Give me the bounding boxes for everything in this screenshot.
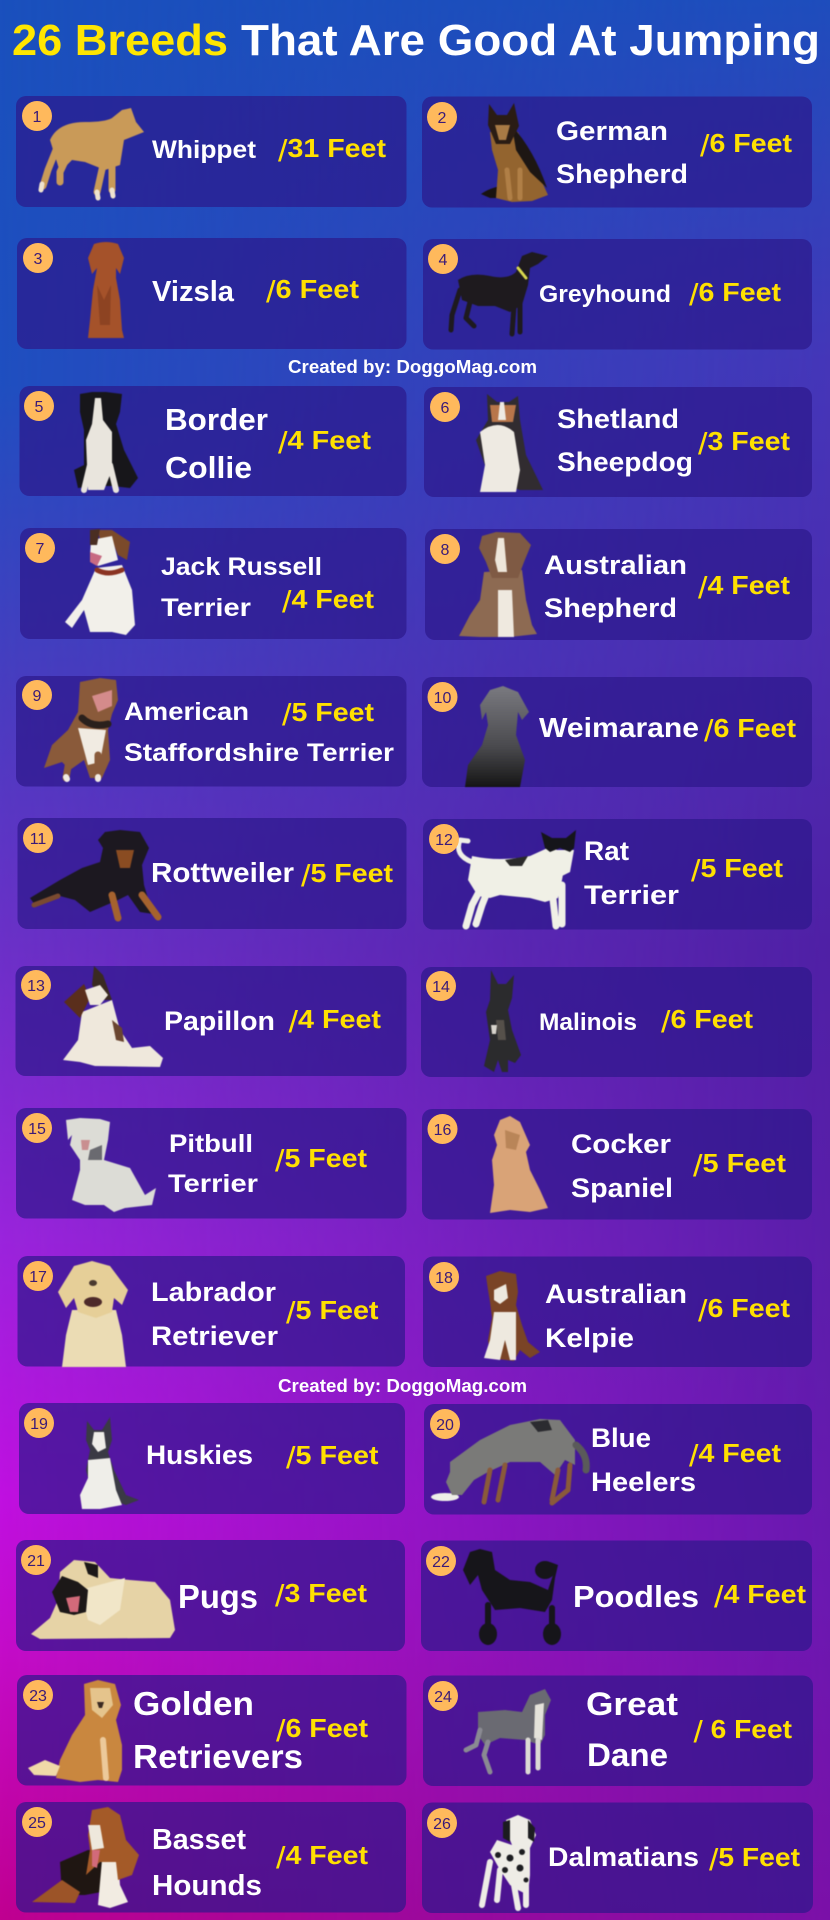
number badge 14 [426, 971, 456, 1001]
jump height: 4 Feet [723, 1579, 806, 1609]
breed name: Border [165, 402, 268, 437]
breed name: Terrier [161, 594, 251, 622]
panel: card 26 Dalmatians [422, 1802, 813, 1913]
jump height: / [275, 1578, 285, 1613]
breed name [545, 1279, 687, 1353]
panel: card 5 Border Collie [20, 386, 406, 496]
icon: pug [31, 1560, 175, 1639]
breed name: Sheepdog [557, 447, 693, 477]
breed name [591, 1423, 696, 1497]
panel: card 6 Shetland Sheepdog [424, 387, 812, 497]
breed name: Great [586, 1686, 678, 1722]
title [12, 16, 820, 65]
number badge 8 [430, 534, 460, 564]
number badge 10: 10 [434, 690, 452, 707]
jump height: 5 Feet [284, 1143, 367, 1173]
panel: card 9 American Staffordshire Terrier [16, 676, 406, 786]
icon: australian shepherd [459, 532, 537, 637]
jump height: 5 Feet [296, 1295, 379, 1325]
number badge 9: 9 [33, 688, 42, 705]
number badge 6: 6 [441, 400, 450, 417]
breed name [161, 553, 322, 622]
breed name: Terrier [584, 880, 680, 910]
panel: card 10 Weimaraner [422, 677, 812, 787]
panel: card 15 Pitbull Terrier [16, 1108, 406, 1218]
breed name: Shetland [557, 404, 679, 434]
breed name [165, 402, 268, 485]
jump height: / [689, 1438, 699, 1473]
breed name [557, 404, 693, 477]
number badge 25: 25 [28, 1815, 46, 1832]
jump height: / [698, 426, 708, 461]
breed name [133, 1685, 303, 1775]
number badge 22: 22 [432, 1554, 450, 1571]
number badge 18: 18 [435, 1270, 453, 1287]
jump height: / [698, 1293, 708, 1328]
number badge 11: 11 [30, 831, 46, 848]
jump height: 4 Feet [707, 570, 790, 600]
number badge 1: 1 [33, 109, 42, 126]
breed name: Pugs [178, 1578, 258, 1615]
number badge 9 [22, 680, 52, 710]
icon: shetland sheepdog [476, 394, 543, 492]
jump height: / [266, 274, 276, 309]
jump height: / [714, 1579, 724, 1614]
breed name [586, 1686, 678, 1773]
number badge 2 [427, 102, 457, 132]
icon: husky [80, 1417, 139, 1509]
panel: card 1 Whippet [16, 96, 406, 207]
number badge 25 [22, 1807, 52, 1837]
icon: border collie [74, 392, 138, 490]
breed name: Retriever [151, 1321, 279, 1351]
panel: card 2 German Shepherd [422, 96, 812, 208]
number badge 7: 7 [36, 541, 45, 558]
jump height: 5 Feet [718, 1842, 800, 1872]
jump height: 4 Feet [298, 1004, 381, 1034]
number badge 10 [428, 682, 458, 712]
panel: card 24 Great Dane [423, 1676, 813, 1786]
icon: american staffordshire terrier [44, 678, 118, 779]
icon: pitbull terrier [66, 1118, 156, 1212]
jump height: / [275, 1143, 285, 1178]
jump height: 31 Feet [287, 133, 386, 163]
jump height: / [694, 1714, 703, 1749]
breed name: Labrador [151, 1277, 277, 1307]
jump height: 6 Feet [698, 277, 781, 307]
panel: card 20 Blue Heelers [424, 1404, 812, 1514]
breed name: Cocker [571, 1129, 672, 1159]
title: That Are Good At Jumping [241, 16, 820, 65]
number badge 12: 12 [435, 832, 453, 849]
breed name: Spaniel [571, 1173, 673, 1203]
number badge 23: 23 [29, 1688, 47, 1705]
breed name: Australian [545, 1279, 687, 1309]
panel: card 14 Malinois [421, 967, 812, 1077]
icon: rottweiler [30, 830, 160, 918]
icon: papillon [63, 966, 163, 1067]
number badge 16: 16 [434, 1122, 452, 1139]
credit line: Created by: DoggoMag.com [278, 1376, 527, 1396]
jump height: 5 Feet [703, 1148, 786, 1178]
breed name [544, 550, 687, 623]
panel: card 17 Labrador Retriever [18, 1256, 405, 1367]
icon: rat terrier [458, 830, 576, 926]
jump height: / [691, 853, 701, 888]
jump height: / [278, 133, 288, 168]
jump height: 5 Feet [296, 1440, 379, 1470]
number badge 26: 26 [433, 1816, 451, 1833]
breed name: Vizsla [152, 276, 235, 308]
breed name: Pitbull [169, 1130, 253, 1158]
breed name: German [556, 116, 668, 146]
breed name [556, 116, 688, 189]
number badge 15 [22, 1113, 52, 1143]
number badge 21: 21 [27, 1553, 45, 1570]
number badge 22 [426, 1546, 456, 1576]
breed name: Terrier [168, 1170, 258, 1198]
icon: basset hound [32, 1807, 139, 1908]
panel: card 8 Australian Shepherd [425, 529, 812, 640]
panel: card 21 Pugs [16, 1540, 405, 1651]
breed name: Huskies [146, 1440, 253, 1470]
breed name: Staffordshire Terrier [124, 739, 394, 767]
panel: card 3 Vizsla [17, 238, 406, 349]
jump height: 5 Feet [310, 858, 393, 888]
icon: poodle [463, 1549, 561, 1645]
breed name [151, 1277, 279, 1351]
breed name: Heelers [591, 1467, 696, 1497]
icon: cocker spaniel [490, 1116, 548, 1213]
breed name [124, 698, 394, 767]
breed name: Golden [133, 1685, 254, 1722]
jump height: / [700, 128, 710, 163]
number badge 16 [428, 1114, 458, 1144]
jump height: 3 Feet [707, 426, 790, 456]
number badge 8: 8 [441, 542, 450, 559]
jump height: / [282, 584, 292, 619]
panel: card 7 Jack Russell Terrier [20, 528, 406, 639]
icon: vizsla [88, 242, 124, 338]
number badge 5: 5 [35, 399, 44, 416]
number badge 19 [24, 1408, 54, 1438]
icon: german shepherd [481, 103, 548, 202]
jump height: 6 Feet [709, 128, 792, 158]
breed name: Whippet [152, 136, 257, 164]
breed name: Weimarane [539, 712, 699, 743]
credit line: Created by: DoggoMag.com [288, 357, 537, 377]
breed name: Australian [544, 550, 687, 580]
jump height: / [286, 1295, 296, 1330]
panel: card 11 Rottweiler [18, 818, 406, 929]
number badge 1 [22, 101, 52, 131]
breed name: American [124, 698, 249, 726]
breed name: Jack Russell [161, 553, 322, 581]
breed name: Kelpie [545, 1323, 634, 1353]
icon: dalmatian [482, 1815, 536, 1908]
jump height: / [301, 858, 311, 893]
panel: card 12 Rat Terrier [423, 819, 812, 930]
breed name: Rat [584, 836, 629, 866]
number badge 4 [428, 244, 458, 274]
breed name: Dane [587, 1737, 668, 1773]
number badge 5 [24, 391, 54, 421]
jump height: / [288, 1004, 298, 1039]
number badge 6 [430, 392, 460, 422]
breed name: Malinois [539, 1009, 637, 1036]
jump height: / [661, 1004, 671, 1039]
jump height: 6 Feet [285, 1713, 368, 1743]
number badge 4: 4 [439, 252, 448, 269]
jump height: / [278, 425, 288, 460]
number badge 20 [430, 1409, 460, 1439]
icon: weimaraner [465, 686, 529, 787]
breed name: Shepherd [544, 593, 677, 623]
breed name: Collie [165, 450, 252, 485]
number badge 13 [21, 970, 51, 1000]
jump height: 4 Feet [698, 1438, 781, 1468]
number badge 23 [23, 1680, 53, 1710]
jump height: 4 Feet [285, 1840, 368, 1870]
breed name [168, 1130, 258, 1198]
number badge 26 [427, 1808, 457, 1838]
number badge 19: 19 [30, 1416, 48, 1433]
number badge 14: 14 [432, 979, 450, 996]
jump height: / [282, 697, 292, 732]
jump height: 3 Feet [284, 1578, 367, 1608]
jump height: / [704, 713, 714, 748]
panel: card 25 Basset Hounds [16, 1802, 406, 1912]
number badge 2: 2 [438, 110, 447, 127]
icon: australian kelpie [484, 1271, 540, 1361]
breed name: Poodles [573, 1579, 699, 1614]
jump height: / [709, 1842, 719, 1877]
number badge 20: 20 [436, 1417, 454, 1434]
jump height: 6 Feet [703, 1714, 792, 1744]
breed name: Basset [152, 1824, 246, 1856]
icon: malinois [484, 970, 521, 1072]
breed name: Dalmatians [548, 1842, 699, 1872]
jump height: / [698, 570, 708, 605]
jump height: / [689, 277, 699, 312]
title: 26 Breeds [12, 16, 228, 65]
icon: great dane [466, 1689, 551, 1772]
breed name: Greyhound [539, 281, 671, 308]
jump height: 5 Feet [291, 697, 374, 727]
breed name: Rottweiler [151, 857, 294, 888]
jump height: 6 Feet [276, 274, 359, 304]
number badge 12 [429, 824, 459, 854]
jump height: / [276, 1840, 286, 1875]
breed name: Retrievers [133, 1738, 303, 1775]
panel: card 19 Huskies [19, 1403, 405, 1514]
number badge 11 [23, 823, 53, 853]
jump height: / [286, 1440, 296, 1475]
jump height: 6 Feet [670, 1004, 753, 1034]
icon: greyhound [451, 252, 548, 334]
jump height: / [276, 1713, 286, 1748]
icon: labrador retriever [58, 1261, 128, 1367]
breed name: Shepherd [556, 159, 688, 189]
panel: card 18 Australian Kelpie [423, 1256, 812, 1367]
icon: whippet [41, 108, 144, 198]
jump height: 6 Feet [707, 1293, 790, 1323]
panel: card 16 Cocker Spaniel [422, 1109, 812, 1220]
number badge 21 [21, 1545, 51, 1575]
panel: card 4 Greyhound [423, 239, 812, 350]
number badge 24 [428, 1681, 458, 1711]
breed name: Papillon [164, 1006, 275, 1036]
jump height: 4 Feet [291, 584, 374, 614]
panel: card 23 Golden Retrievers [17, 1675, 406, 1786]
icon: jack russell terrier [65, 529, 135, 635]
breed name [152, 1824, 262, 1902]
number badge 24: 24 [434, 1689, 452, 1706]
breed name [571, 1129, 673, 1203]
breed name: Blue [591, 1423, 651, 1453]
breed name: Hounds [152, 1870, 262, 1902]
number badge 3: 3 [34, 251, 43, 268]
panel: card 13 Papillon [16, 966, 406, 1076]
jump height: 5 Feet [700, 853, 783, 883]
number badge 18 [429, 1262, 459, 1292]
jump height: / [693, 1148, 703, 1183]
number badge 17: 17 [29, 1269, 47, 1286]
number badge 13: 13 [27, 978, 45, 995]
panel: card 22 Poodles [421, 1540, 812, 1651]
icon: blue heeler [431, 1419, 586, 1503]
jump height: 6 Feet [713, 713, 796, 743]
jump height: 4 Feet [288, 425, 371, 455]
icon: golden retriever [28, 1680, 122, 1782]
number badge 17 [23, 1261, 53, 1291]
number badge 15: 15 [28, 1121, 46, 1138]
breed name [584, 836, 680, 910]
number badge 7 [25, 533, 55, 563]
number badge 3 [23, 243, 53, 273]
